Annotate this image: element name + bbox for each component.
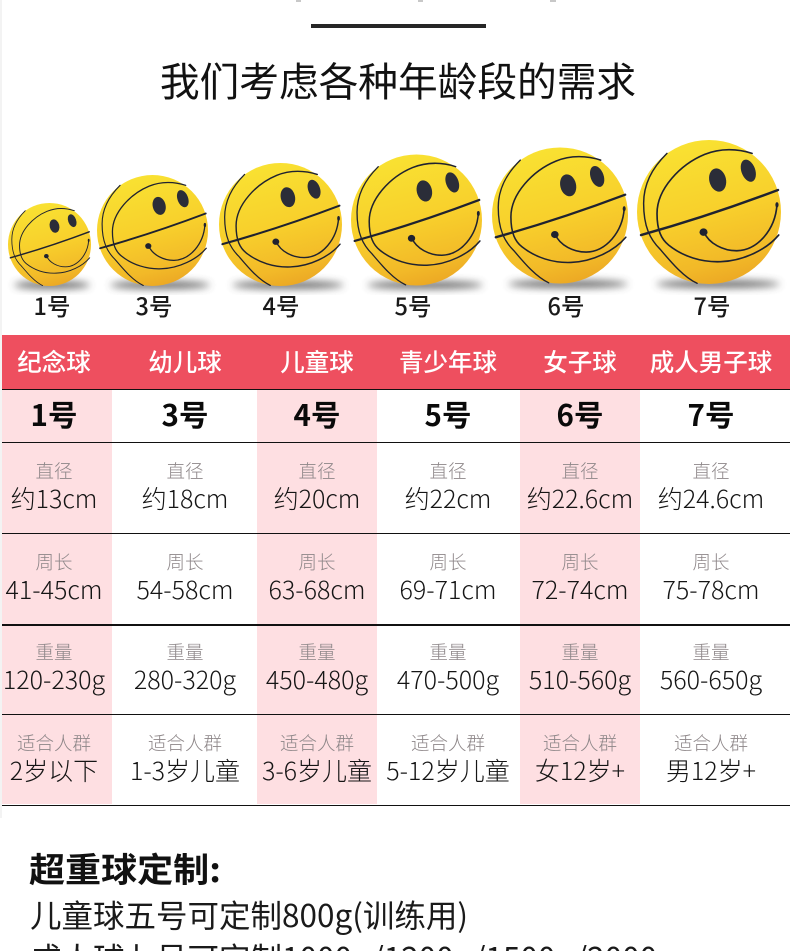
ball: size 4 bbox=[219, 163, 342, 286]
row: ball size numbers bbox=[31, 393, 734, 435]
row: circumference: 72-74cm bbox=[532, 571, 628, 607]
ball: size 7 bbox=[637, 140, 781, 284]
table header: ball categories bbox=[2, 335, 790, 389]
ball size labels: 4号 bbox=[263, 288, 299, 322]
ball: size 1 bbox=[8, 203, 91, 286]
row: diameter bbox=[11, 458, 764, 516]
table header: ball categories: 儿童球 bbox=[280, 344, 354, 379]
ball shadows bbox=[14, 280, 780, 289]
row: suitable age group: 男12岁+ bbox=[666, 752, 756, 788]
ball size labels: 1号 bbox=[34, 288, 70, 322]
row: diameter: 直径 bbox=[298, 458, 336, 484]
row: suitable age group bbox=[10, 730, 756, 788]
row: weight: 重量 bbox=[429, 639, 466, 665]
row: diameter: 直径 bbox=[561, 458, 598, 484]
row: suitable age group: 适合人群 bbox=[411, 730, 485, 756]
row: weight: 450-480g bbox=[266, 661, 368, 697]
row: circumference: 63-68cm bbox=[269, 571, 365, 607]
ball size labels bbox=[34, 288, 730, 322]
row: weight: 重量 bbox=[298, 639, 336, 665]
row: suitable age group: 3-6岁儿童 bbox=[262, 752, 372, 788]
row: circumference: 75-78cm bbox=[663, 571, 759, 607]
row: diameter: 直径 bbox=[429, 458, 466, 484]
row: weight: 重量 bbox=[561, 639, 598, 665]
row: suitable age group: 2岁以下 bbox=[10, 752, 98, 788]
row: ball size numbers: 4号 bbox=[294, 393, 340, 435]
text: child ball customization: 儿童球五号可定制800g(训练用) bbox=[30, 891, 468, 937]
row: diameter: 约18cm bbox=[142, 480, 228, 516]
ball size labels: 6号 bbox=[548, 288, 584, 322]
row: weight: 重量 bbox=[35, 639, 72, 665]
row: diameter: 约24.6cm bbox=[658, 480, 764, 516]
row: diameter: 直径 bbox=[35, 458, 72, 484]
row: circumference: 69-71cm bbox=[400, 571, 496, 607]
row: circumference: 周长 bbox=[35, 549, 72, 575]
row: ball size numbers: 5号 bbox=[425, 393, 471, 435]
table header: ball categories: 幼儿球 bbox=[148, 344, 222, 379]
ball size labels: 3号 bbox=[136, 288, 172, 322]
ball size illustration bbox=[8, 140, 782, 295]
row: diameter: 直径 bbox=[692, 458, 730, 484]
row: circumference: 周长 bbox=[166, 549, 204, 575]
ball: size 5 bbox=[351, 154, 482, 286]
row: circumference: 周长 bbox=[429, 549, 466, 575]
row: weight: 重量 bbox=[166, 639, 204, 665]
row: ball size numbers: 1号 bbox=[31, 393, 77, 435]
row: suitable age group: 5-12岁儿童 bbox=[386, 752, 510, 788]
table header: ball categories: 成人男子球 bbox=[650, 344, 772, 379]
row: weight: 重量 bbox=[692, 639, 730, 665]
table header: ball categories: 纪念球 bbox=[17, 344, 91, 379]
row: weight: 280-320g bbox=[134, 661, 236, 697]
row: suitable age group: 适合人群 bbox=[280, 730, 354, 756]
title: 我们考虑各种年龄段的需求 bbox=[160, 51, 636, 108]
row: ball size numbers: 6号 bbox=[557, 393, 603, 435]
row: suitable age group: 1-3岁儿童 bbox=[130, 752, 240, 788]
ball size labels: 7号 bbox=[694, 288, 730, 322]
row: circumference: 41-45cm bbox=[6, 571, 102, 607]
row: weight: 120-230g bbox=[3, 661, 105, 697]
row: weight bbox=[3, 639, 762, 697]
row: weight: 510-560g bbox=[529, 661, 631, 697]
ball: size 3 bbox=[97, 175, 208, 286]
row: suitable age group: 适合人群 bbox=[17, 730, 91, 756]
row: suitable age group: 适合人群 bbox=[148, 730, 222, 756]
ball: size 6 bbox=[492, 148, 628, 284]
row: circumference: 周长 bbox=[561, 549, 598, 575]
row: ball size numbers: 3号 bbox=[162, 393, 208, 435]
row: suitable age group: 适合人群 bbox=[674, 730, 748, 756]
row: circumference: 54-58cm bbox=[137, 571, 233, 607]
row: circumference: 周长 bbox=[692, 549, 730, 575]
heading: heavy ball customization: 超重球定制: bbox=[29, 843, 221, 892]
row: suitable age group: 女12岁+ bbox=[535, 752, 625, 788]
row: circumference: 周长 bbox=[298, 549, 336, 575]
row: diameter: 直径 bbox=[166, 458, 204, 484]
row: suitable age group: 适合人群 bbox=[543, 730, 617, 756]
ball size labels: 5号 bbox=[395, 288, 431, 322]
table header: ball categories: 女子球 bbox=[543, 344, 617, 379]
row: weight: 560-650g bbox=[660, 661, 762, 697]
row: circumference bbox=[6, 549, 759, 607]
row: diameter: 约22.6cm bbox=[527, 480, 633, 516]
row: diameter: 约20cm bbox=[274, 480, 360, 516]
row: weight: 470-500g bbox=[397, 661, 499, 697]
row: ball size numbers: 7号 bbox=[688, 393, 734, 435]
row: diameter: 约22cm bbox=[405, 480, 491, 516]
row: diameter: 约13cm bbox=[11, 480, 97, 516]
table header: ball categories: 青少年球 bbox=[399, 344, 497, 379]
